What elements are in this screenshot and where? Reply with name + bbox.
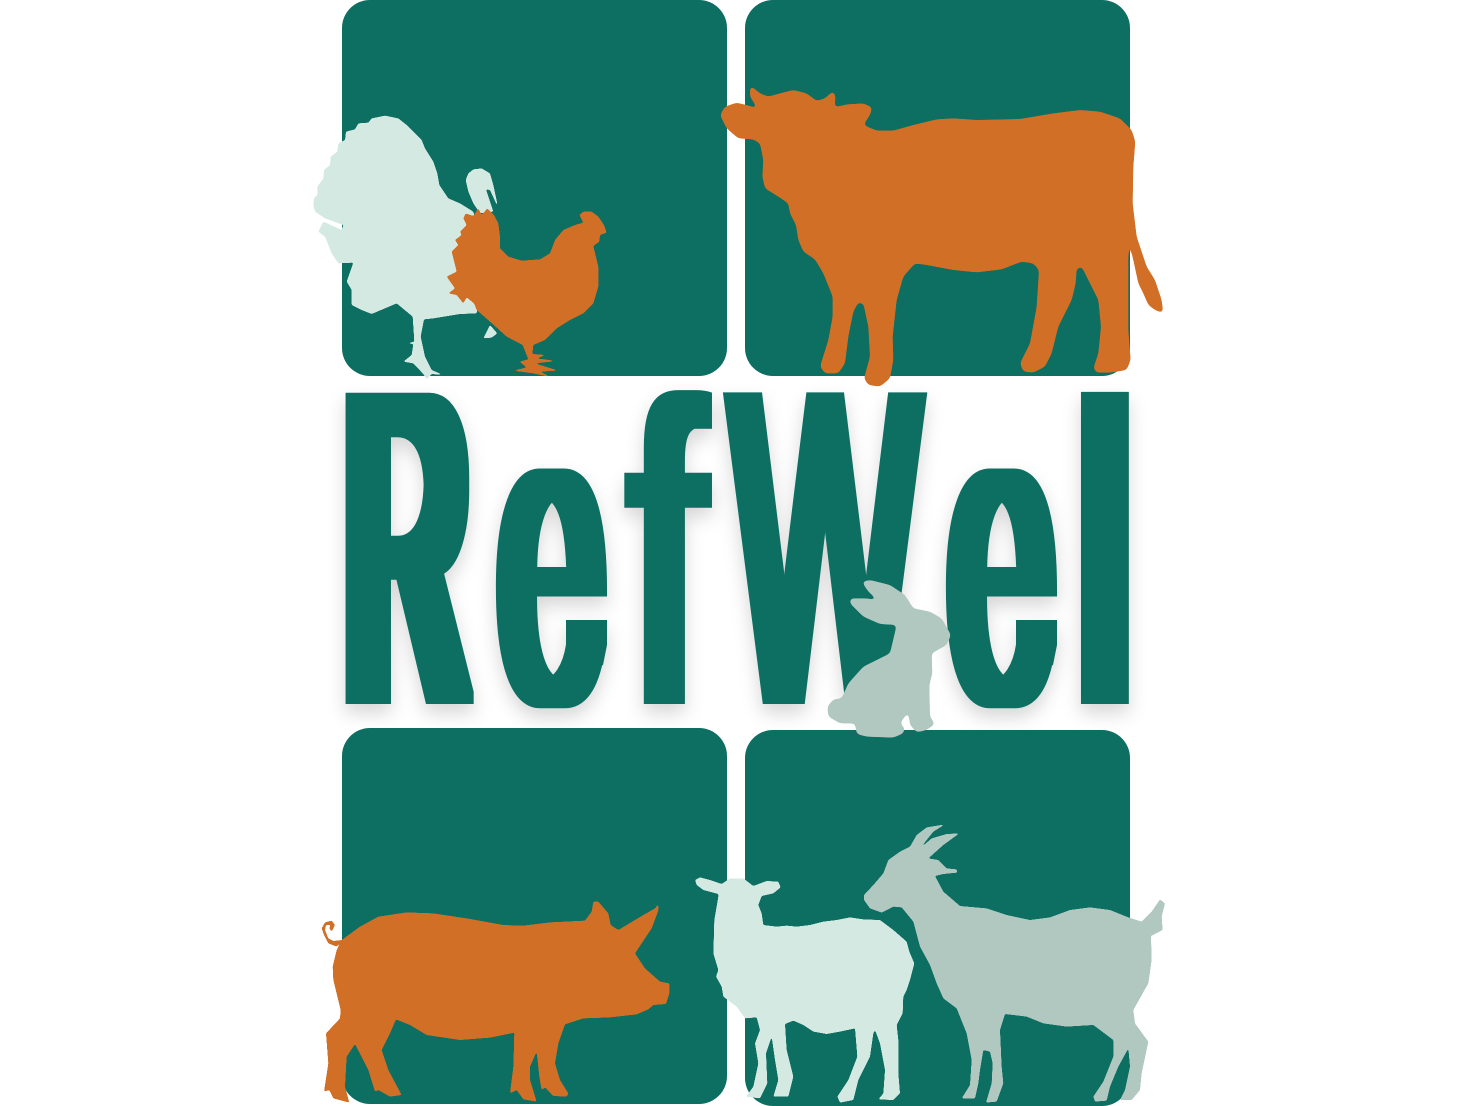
icon: sheep: [695, 877, 914, 1103]
icon: rabbit: [827, 580, 951, 738]
icon: cow: [720, 85, 1163, 387]
title: RefWel: l: [1070, 316, 1140, 796]
title: RefWel: [347, 295, 1140, 801]
icon: goat: [864, 824, 1165, 1103]
icon: pig: [322, 902, 669, 1103]
panel: top left: [342, 0, 727, 376]
panel: top right: [745, 0, 1130, 376]
panel: bottom left: [342, 728, 727, 1104]
icon: chicken: [447, 208, 607, 377]
title: RefWel: f: [630, 317, 703, 790]
title: RefWel: R: [347, 304, 466, 791]
title: RefWel: W: [732, 295, 920, 801]
title: RefWel: e: [500, 310, 603, 798]
title: RefWel: e: [950, 310, 1053, 798]
panel: bottom right: [745, 730, 1130, 1106]
icon: turkey: [313, 116, 498, 379]
